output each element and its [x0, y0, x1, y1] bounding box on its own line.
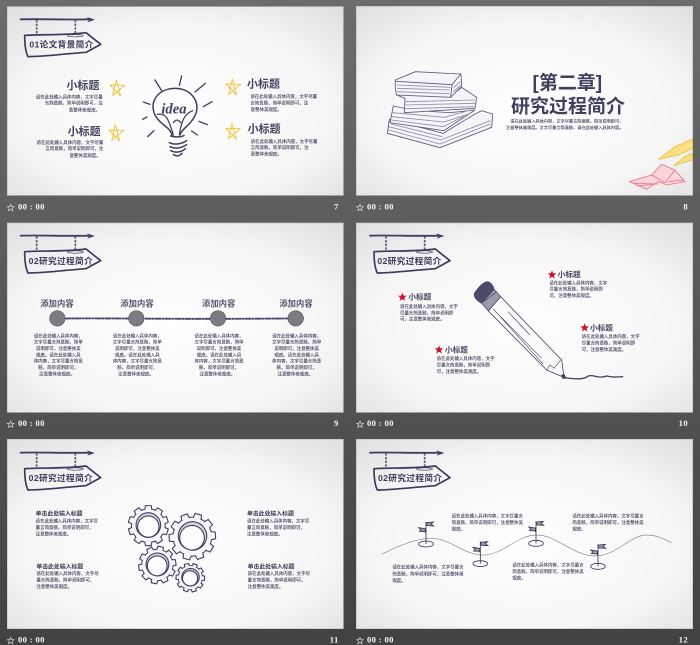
- slide 11 sign heading: 02研究过程简介: [29, 472, 93, 483]
- item: right: 可，注意整体美观度。: [582, 346, 626, 353]
- illustration: red open book: [629, 164, 685, 189]
- timeline node 2: 添加内容: [120, 299, 154, 309]
- slide 10 sign heading: 02研究过程简介: [377, 255, 442, 266]
- text: column 1: 观度。请在此处输入具: [36, 351, 81, 358]
- text: upper right item: 言简意赅，简单说明即可，注: [250, 99, 309, 106]
- wavy hill line: [382, 535, 672, 556]
- timeline node 1: [40, 299, 74, 326]
- chapter title: [511, 71, 625, 117]
- text: lower left item: 言简意赅，简单说明即可，注: [45, 145, 104, 152]
- slide 10 sign heading: [370, 233, 450, 273]
- footer: slide 7: 00 : 00: [18, 201, 45, 211]
- item: top right: 尽量言简意赅，简单说明即: [549, 286, 603, 293]
- icon: flag 3: [529, 521, 544, 546]
- illustration: four gears: [128, 506, 221, 596]
- text: column 3: 观度。请在此处输入具: [197, 351, 242, 358]
- text: upper left item: 意整体美观度。: [69, 107, 100, 114]
- slide 8 card: [356, 6, 693, 195]
- text: block 3: [512, 561, 584, 582]
- text: upper right: 注意整体美观度。: [247, 530, 283, 537]
- slide 9 sign heading: [21, 233, 101, 273]
- text: upper right item: [247, 76, 318, 113]
- text: lower left: 注意整体美观度。: [36, 583, 72, 590]
- footer: slide 12: 00 : 00: [367, 635, 394, 645]
- text: column 3: 文字尽量言简意赅，简单: [194, 339, 244, 346]
- panel: slide 8 chapter title: [356, 6, 693, 211]
- text: column 1: [34, 332, 83, 377]
- text: block 4: [572, 512, 644, 533]
- slide 11 card: [7, 439, 343, 629]
- text: lower right: 单击此处输入标题: [248, 562, 295, 570]
- text: column 4: 体内容，文字尽量言简意: [272, 358, 322, 365]
- text: column 2: 观度。请在此处输入具: [115, 351, 160, 358]
- item: right: 小标题: [590, 322, 613, 332]
- text: lower left: 请在此处输入具体内容，文字尽: [36, 570, 99, 577]
- text: column 2: 注意整体美观度。: [118, 370, 154, 377]
- text: block 4: 请在此处输入具体内容，文字尽量言: [572, 512, 644, 519]
- footer: slide 8: 00 : 00: [367, 201, 394, 211]
- text: column 2: [113, 332, 162, 377]
- text: block 2: 请在此处输入具体内容，文字尽量言: [452, 512, 523, 519]
- footer: slide 7: [7, 201, 339, 211]
- timeline node 3: 添加内容: [202, 299, 236, 309]
- text: lower left item: 请在此处输入具体内容，文字尽量: [37, 139, 104, 146]
- item: left upper: 小标题: [408, 292, 432, 302]
- footer: slide 11: 00 : 00: [18, 635, 45, 645]
- text: block 1: 简意赅，简单说明即可，注意整体美: [392, 570, 464, 577]
- footer: slide 12: 12: [679, 635, 688, 645]
- text: column 4: 文字尽量言简意赅，简单: [272, 339, 322, 346]
- text: upper left: 量言简意赅，简单说明即可，: [36, 524, 94, 531]
- text: block 1: 请在此处输入具体内容，文字尽量言: [392, 564, 464, 571]
- footer: slide 10: 10: [679, 418, 688, 428]
- slide 7 sign heading: [21, 17, 101, 57]
- text: lower right item: 小标题: [248, 122, 281, 136]
- text: lower left: [36, 562, 99, 590]
- illustration: stack of books: [387, 72, 493, 148]
- item: top right: 请在此处输入具体内容，文字: [549, 279, 608, 286]
- footer: slide 12: [357, 635, 688, 645]
- text: block 1: [392, 564, 464, 584]
- illustration: pencil and scribble: [474, 282, 623, 379]
- chapter title: [第二章]: [533, 71, 602, 94]
- icon: flag 1: [419, 522, 434, 547]
- text: upper left: 单击此处输入标题: [36, 510, 83, 518]
- text: lower left item: 意整体美观度。: [69, 152, 101, 159]
- text: upper right: 量言简意赅，简单说明即可，: [247, 524, 305, 531]
- icon: flag 4: [591, 544, 606, 569]
- item: right: 请在此处输入具体内容，文字: [582, 333, 640, 340]
- text: lower left item: [37, 124, 104, 159]
- text: block 2: 简意赅，简单说明即可，注意整体美: [452, 519, 523, 526]
- text: block 4: 简意赅，简单说明即可，注意整体美: [572, 519, 644, 526]
- text: block 3: 观度。: [512, 575, 526, 582]
- text: upper left item: 言简意赅，简单说明即可，注: [45, 100, 103, 107]
- footer: slide 11: [7, 635, 339, 645]
- text: column 3: 赅，简单说明即可，: [199, 364, 239, 371]
- text: lower right item: 请在此处输入具体内容，文字尽量: [251, 138, 318, 145]
- text: column 1: 文字尽量言简意赅，简单: [34, 339, 83, 346]
- text: lower right: 请在此处输入具体内容，文字尽: [248, 570, 311, 577]
- text: column 1: 注意整体美观度。: [39, 370, 75, 377]
- item: left lower: 请在此处输入具体内容，文字: [437, 355, 495, 362]
- text: column 3: [194, 332, 244, 377]
- slide 12 card: [356, 439, 693, 629]
- timeline node 2: [120, 299, 154, 326]
- chapter title: 研究过程简介: [511, 94, 625, 117]
- item: left lower: [435, 344, 495, 375]
- text: upper left item: [36, 78, 103, 114]
- text: column 2: 说明即可，注意整体美: [115, 345, 160, 352]
- slide 10 card: [356, 223, 693, 412]
- item: left upper: 请在此处输入具体内容，文字: [400, 303, 458, 310]
- illustration: yellow pencils: [658, 139, 692, 166]
- text: upper left: 注意整体美观度。: [36, 530, 71, 537]
- footer: slide 9: 9: [334, 418, 339, 428]
- text: column 4: 说明即可，注意整体美: [274, 345, 319, 352]
- text: column 4: 观度。请在此处输入具: [274, 351, 319, 358]
- item: left upper: 可，注意整体美观度。: [400, 316, 445, 323]
- item: left lower: 可，注意整体美观度。: [437, 368, 481, 375]
- footer: slide 10: [357, 418, 688, 428]
- text: column 4: 请在此处输入具体内容，: [272, 332, 321, 339]
- text: upper left item: 请在此处输入具体内容，文字尽量: [36, 94, 103, 101]
- footer: slide 8: [357, 201, 688, 211]
- panel: slide 10 pencil: [356, 223, 693, 428]
- text: upper right: 请在此处输入具体内容，文字尽: [247, 517, 310, 524]
- text: upper right: 单击此处输入标题: [247, 510, 294, 518]
- text: upper left: 请在此处输入具体内容，文字尽: [36, 517, 99, 524]
- slide 7 card: [7, 7, 343, 195]
- slide 11 sign heading: [21, 450, 101, 490]
- panel: slide 11 gears: [7, 439, 343, 645]
- text: column 2: 请在此处输入具体内容，: [113, 332, 162, 339]
- item: top right: [548, 269, 608, 299]
- timeline scribble: [55, 316, 304, 322]
- text: upper left: [36, 510, 99, 537]
- text: lower right item: 言简意赅，简单说明即可，注: [251, 144, 309, 151]
- text: block 2: [452, 512, 523, 533]
- slide 9 card: [7, 223, 343, 412]
- text: column 1: 说明即可，注意整体美: [36, 345, 81, 352]
- text: column 4: [272, 332, 322, 377]
- text: column 3: 体内容，文字尽量言简意: [194, 358, 244, 365]
- text: lower left: 单击此处输入标题: [36, 562, 83, 570]
- icon: yellow star: [110, 80, 125, 96]
- text: column 3: 说明即可，注意整体美: [197, 345, 242, 352]
- text: upper right item: 请在此处输入具体内容，文字尽量: [250, 93, 318, 100]
- slide 7 sign heading: 01论文背景简介: [29, 39, 94, 50]
- text: lower right item: [248, 122, 318, 158]
- icon: light bulb with idea: [143, 76, 212, 156]
- timeline node 4: 添加内容: [279, 299, 313, 309]
- text: column 3: 注意整体美观度。: [200, 370, 235, 377]
- text: upper right: [247, 510, 310, 537]
- text: lower left item: 小标题: [68, 124, 101, 138]
- text: column 4: 赅，简单说明即可，: [277, 364, 317, 371]
- footer: slide 9: 00 : 00: [18, 418, 45, 428]
- slide 12 sign heading: [370, 450, 450, 490]
- footer: slide 11: 11: [330, 635, 339, 645]
- text: block 3: 请在此处输入具体内容，文字尽量言: [512, 561, 584, 568]
- text: column 2: 赅，简单说明即可，: [117, 364, 157, 371]
- text: upper right item: 小标题: [247, 76, 280, 90]
- text: block 2: 观度。: [452, 526, 465, 533]
- text: column 1: 赅，简单说明即可，: [38, 364, 78, 371]
- icon: yellow star: [226, 79, 241, 95]
- text: column 3: 请在此处输入具体内容，: [194, 332, 243, 339]
- text: block 3: 简意赅，简单说明即可，注意整体美: [512, 568, 584, 575]
- icon: yellow star: [226, 123, 240, 139]
- icon: yellow star: [109, 125, 124, 141]
- timeline node 3: [202, 299, 236, 326]
- item: top right: 可，注意整体美观度。: [549, 292, 594, 299]
- slide 12 sign heading: 02研究过程简介: [378, 472, 442, 483]
- footer: slide 9: [7, 418, 339, 428]
- text: upper right item: 意整体美观度。: [251, 106, 282, 113]
- text: column 2: 体内容，文字尽量言简意: [113, 358, 162, 365]
- text: upper left item: 小标题: [66, 78, 99, 92]
- text: lower right item: 意整体美观度。: [251, 151, 282, 158]
- item: left upper: [398, 292, 458, 323]
- text: block 4: 观度。: [572, 526, 586, 533]
- text: column 4: 注意整体美观度。: [278, 370, 313, 377]
- item: left lower: 小标题: [445, 344, 468, 354]
- timeline node 4: [279, 299, 313, 326]
- item: right: [580, 322, 640, 353]
- text: column 1: 体内容，文字尽量言简意: [34, 358, 83, 365]
- footer: slide 7: 7: [334, 201, 339, 211]
- footer: slide 10: 00 : 00: [367, 418, 394, 428]
- text: column 1: 请在此处输入具体内容，: [34, 332, 83, 339]
- text: column 2: 文字尽量言简意赅，简单: [113, 339, 162, 346]
- text: lower left: 量言简意赅，简单说明即可，: [36, 577, 94, 584]
- item: left lower: 尽量言简意赅，简单说明即: [437, 361, 491, 368]
- chapter description: 注意整体美观度。文字尽量言简意赅，请在此处输入具体内容。: [506, 124, 623, 131]
- item: top right: 小标题: [558, 269, 581, 279]
- panel: slide 7 idea bulb: [7, 7, 343, 211]
- text: lower right: 量言简意赅，简单说明即可，: [248, 577, 306, 584]
- text: block 1: 观度。: [392, 577, 406, 584]
- chapter description: [506, 117, 623, 131]
- chapter description: 请在此处输入具体内容，文字尽量言简意赅，简单说明即可，: [510, 117, 623, 124]
- item: left upper: 尽量言简意赅，简单说明即: [400, 309, 454, 316]
- slide 9 sign heading: 02研究过程简介: [29, 255, 93, 266]
- text: lower right: [248, 562, 311, 590]
- text: lower right: 注意整体美观度。: [248, 583, 283, 590]
- icon: light bulb with idea: idea: [161, 101, 187, 117]
- icon: flag 2: [473, 542, 488, 567]
- item: right: 尽量言简意赅，简单说明即: [582, 339, 636, 346]
- timeline node 1: 添加内容: [40, 299, 74, 309]
- panel: slide 12 flags on hills: [356, 439, 693, 645]
- panel: slide 9 timeline: [7, 223, 343, 428]
- footer: slide 8: 8: [683, 201, 688, 211]
